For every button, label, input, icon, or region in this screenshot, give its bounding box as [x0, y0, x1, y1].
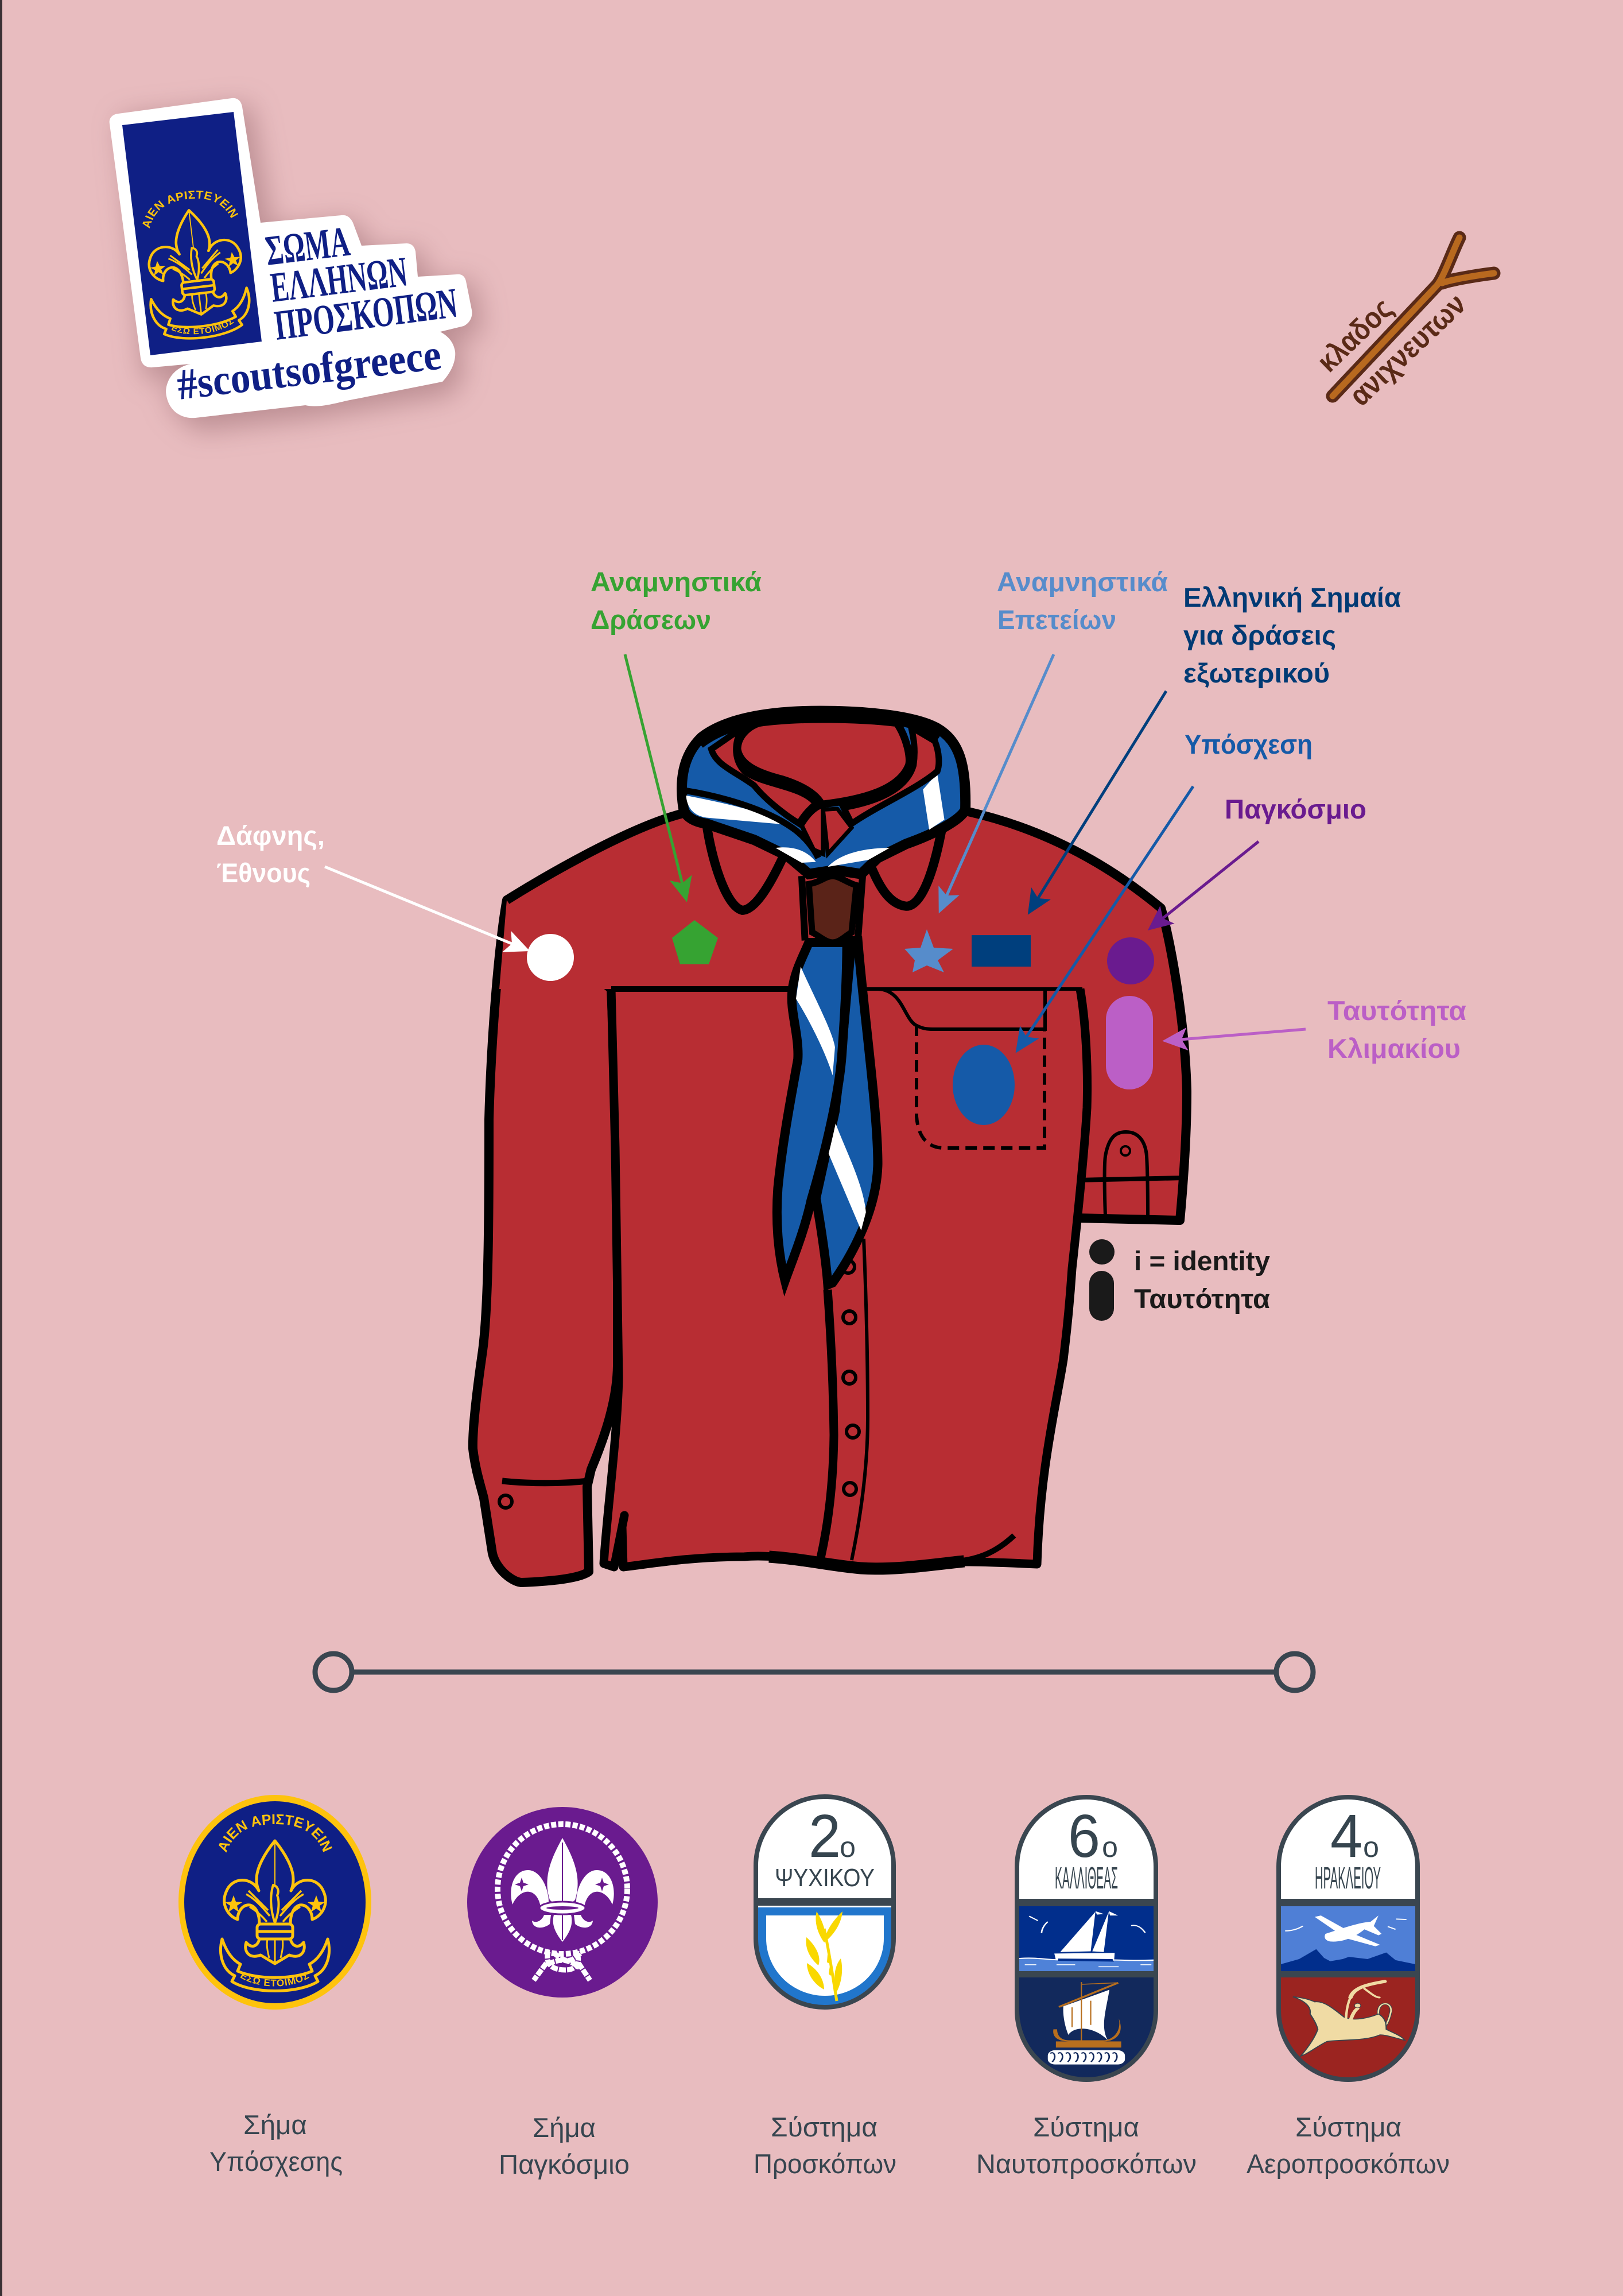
badge: promise emblem: ΕΣΩ ΕΤΟΙΜΟΣ — [240, 1972, 309, 1986]
logo: trackers branch stick: ανιχνευτων — [1343, 287, 1473, 413]
label: Greek flag — [1183, 582, 1401, 688]
badge: sea scout system 6th Kallithea — [1015, 1797, 1158, 2084]
badge: scout system 2nd Psychiko: ο — [840, 1831, 856, 1863]
caption: sea scout system — [976, 2112, 1197, 2179]
badge position: light blue star — [904, 929, 953, 972]
neckerchief band around the neck — [682, 711, 965, 874]
unit number and name: 6 — [1068, 1802, 1100, 1870]
arrow: navy — [1030, 691, 1166, 911]
label: Greek flag: Ελληνική Σημαία — [1183, 582, 1401, 612]
shirt outline strokes — [502, 812, 1187, 1569]
logo sticker backing — [110, 98, 472, 418]
caption: sea scout system: Ναυτοπροσκόπων — [976, 2148, 1197, 2179]
caption: air scout system: Αεροπροσκόπων — [1247, 2148, 1450, 2179]
woggle — [809, 876, 856, 943]
olive branch — [806, 1911, 842, 2001]
caption: promise badge: Υπόσχεσης — [209, 2146, 343, 2177]
shirt illustration — [473, 711, 1187, 1583]
badge: scout system 2nd Psychiko: ΨΥΧΙΚΟΥ — [775, 1864, 875, 1892]
arrow: blue — [1018, 786, 1193, 1049]
caption: air scout system — [1247, 2112, 1450, 2179]
collar left band — [711, 728, 816, 824]
chest pocket — [878, 989, 1045, 1148]
divider line with end circles — [315, 1654, 1313, 1690]
neckerchief and collar — [682, 711, 965, 1285]
unit number and name: 2 — [809, 1802, 841, 1870]
logo emblem: ΑΙΕΝ ΑΡΙΣΤΕΥΕΙΝ — [142, 191, 239, 228]
label: world: Παγκόσμιο — [1225, 794, 1366, 824]
label: laurel, nation: Δάφνης, — [216, 820, 325, 851]
caption: scout system — [754, 2112, 896, 2179]
label: activity commemoratives: Αναμνηστικά — [591, 567, 762, 597]
collar inner back — [737, 719, 909, 804]
badge position: purple circle — [1107, 937, 1154, 984]
sailing boat and galley pictures — [1018, 1911, 1155, 2065]
legend: i = identity — [1089, 1239, 1270, 1321]
logo: trackers branch stick: κλαδος — [1311, 292, 1399, 379]
shirt buttons — [499, 1146, 1130, 1508]
badge: air scout system 4th Heraklion: ο — [1363, 1831, 1379, 1863]
label: laurel, nation: Έθνους — [216, 858, 310, 888]
legend: i = identity: Ταυτότητα — [1134, 1283, 1270, 1314]
collar points — [706, 824, 783, 910]
plane and bull pictures — [1280, 1915, 1417, 2056]
logo wordmark — [174, 218, 460, 409]
badge: promise emblem: ΑΙΕΝ ΑΡΙΣΤΕΥΕΙΝ — [219, 1814, 332, 1853]
badge position: promise blue oval — [953, 1045, 1015, 1125]
badge: world scout emblem — [467, 1807, 658, 1998]
label: troop identity — [1327, 995, 1466, 1064]
label: laurel, nation — [216, 820, 325, 888]
caption: world badge: Παγκόσμιο — [499, 2149, 630, 2179]
caption: scout system: Προσκόπων — [754, 2148, 896, 2179]
logo: trackers branch stick — [1311, 238, 1494, 413]
unit number and name: 4 — [1330, 1802, 1362, 1870]
caption: promise badge — [209, 2109, 343, 2177]
badge: sea scout system 6th Kallithea: ΚΑΛΛΙΘΕΑΣ — [1055, 1861, 1118, 1895]
neckerchief left tail — [777, 943, 847, 1281]
label: Greek flag: για δράσεις — [1183, 620, 1336, 650]
caption: air scout system: Σύστημα — [1295, 2112, 1401, 2142]
collar right band — [844, 727, 939, 824]
shirt body fill — [499, 812, 1187, 1569]
badge: air scout system 4th Heraklion: ΗΡΑΚΛΕΙΟΥ — [1315, 1861, 1381, 1895]
caption: sea scout system: Σύστημα — [1033, 2112, 1139, 2142]
label: troop identity: Ταυτότητα — [1327, 995, 1466, 1026]
bull-leaping acrobats — [1345, 1980, 1387, 2019]
arrow: light blue — [941, 654, 1054, 909]
left sleeve — [473, 900, 618, 1583]
arrow: white — [325, 867, 526, 949]
caption: scout system: Σύστημα — [771, 2112, 877, 2142]
label: activity commemoratives — [591, 567, 762, 635]
logo blue panel — [122, 112, 262, 355]
collar front — [802, 805, 823, 854]
logo emblem — [142, 191, 251, 340]
arrow: purple — [1151, 841, 1259, 928]
badge: scout system 2nd Psychiko — [754, 1797, 896, 2007]
logo wordmark: ΣΩΜΑ — [263, 218, 352, 275]
label: anniversary commemoratives: Επετείων — [997, 604, 1116, 635]
logo wordmark: #scoutsofgreece — [174, 331, 444, 409]
arrow: green — [625, 654, 686, 898]
neckerchief right tail — [816, 940, 878, 1285]
badge: promise emblem — [178, 1795, 371, 2010]
label: Greek flag: εξωτερικού — [1183, 658, 1330, 688]
badge: sea scout system 6th Kallithea: ο — [1102, 1831, 1118, 1863]
label: troop identity: Κλιμακίου — [1327, 1033, 1461, 1064]
label: activity commemoratives: Δράσεων — [591, 604, 711, 635]
caption: promise badge: Σήμα — [243, 2109, 307, 2140]
label: anniversary commemoratives: Αναμνηστικά — [997, 567, 1168, 597]
badge position: white circle — [527, 934, 574, 981]
label: promise: Υπόσχεση — [1185, 729, 1313, 759]
badge position: pink pill — [1106, 996, 1153, 1089]
logo wordmark: ΠΡΟΣΚΟΠΩΝ — [272, 280, 460, 350]
badge: air scout system 4th Heraklion — [1276, 1797, 1420, 2084]
logo: Scouts of Greece sticker — [109, 95, 491, 441]
logo emblem: ΕΣΩ ΕΤΟΙΜΟΣ — [171, 318, 234, 334]
label: anniversary commemoratives — [997, 567, 1168, 635]
badge position: green pentagon — [672, 920, 718, 964]
legend: i = identity: i = identity — [1134, 1246, 1270, 1276]
badge position: navy flag — [972, 935, 1031, 967]
caption: world badge — [499, 2112, 630, 2179]
caption: world badge: Σήμα — [533, 2112, 596, 2143]
collar top edge thick line — [700, 713, 941, 743]
arrow: pink — [1167, 1029, 1306, 1041]
logo wordmark: ΕΛΛΗΝΩΝ — [268, 248, 410, 312]
